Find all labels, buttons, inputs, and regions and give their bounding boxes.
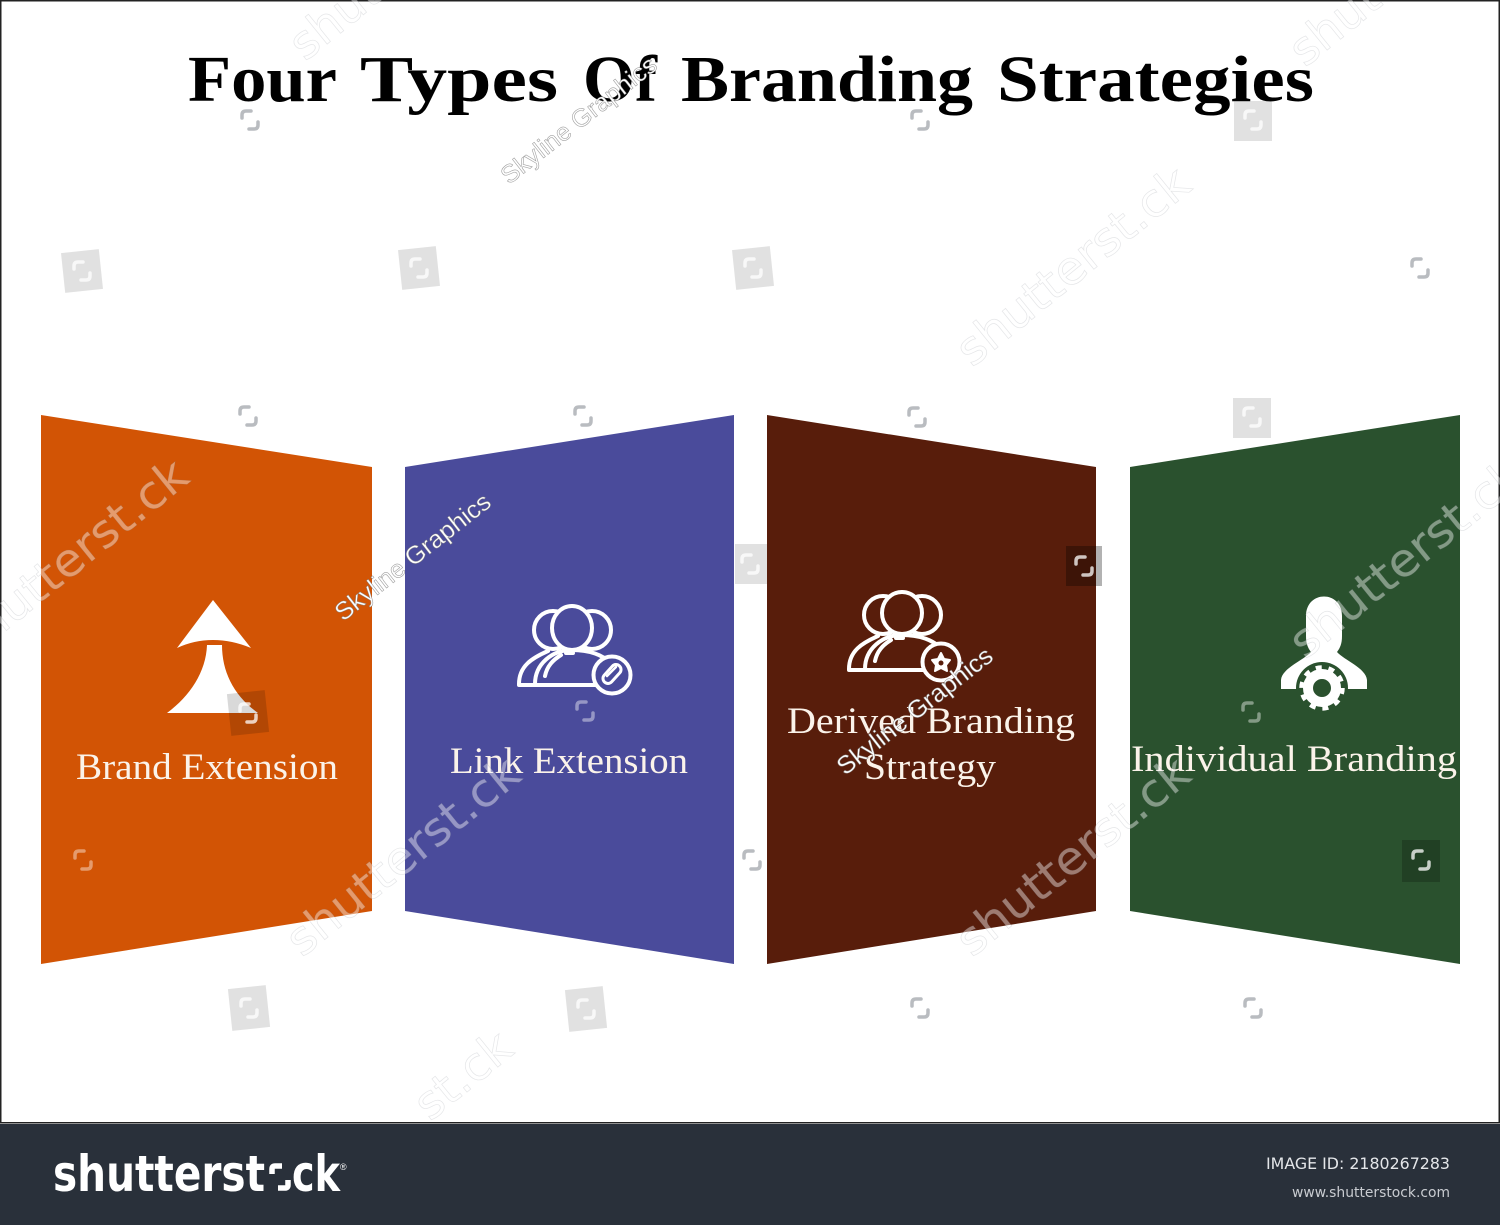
panel: individual branding	[1130, 415, 1460, 964]
website: www.shutterstock.com	[1292, 1185, 1450, 1201]
label: derived branding strategy	[787, 701, 1075, 788]
footer logo: ck	[292, 1145, 341, 1203]
watermark marks on white	[240, 111, 1428, 1017]
label: brand extension: Brand Extension	[76, 747, 338, 788]
title: Branding	[681, 43, 973, 116]
icon: people with star	[849, 592, 960, 680]
icon: person with gear	[1281, 596, 1367, 714]
label: derived branding strategy: Strategy	[864, 747, 997, 788]
label: individual branding: Individual Branding	[1131, 739, 1457, 780]
watermarks: Skyline Graphics	[495, 51, 662, 190]
title: Types	[360, 43, 558, 116]
watermarks: Skyline Graphics	[831, 642, 998, 781]
registered mark: ®	[340, 1162, 347, 1172]
watermarks: Skyline Graphics	[329, 488, 496, 627]
title: Four	[188, 43, 337, 116]
panel: link extension	[405, 415, 734, 964]
watermark marks inside squares	[74, 111, 1429, 1018]
icon: people with paperclip	[519, 606, 630, 694]
footer logo: shutterst	[53, 1145, 265, 1203]
label: link extension: Link Extension	[450, 741, 688, 782]
panel: brand extension	[41, 415, 372, 964]
watermarks: st.ck	[403, 1019, 523, 1131]
label: derived branding strategy: Derived Branding	[787, 701, 1075, 742]
footer bar	[0, 1124, 1500, 1225]
title: Strategies	[997, 43, 1314, 116]
watermark marks on panels	[75, 702, 1259, 869]
watermark squares	[61, 101, 1440, 1032]
icon: upward arrow	[167, 600, 258, 713]
watermarks: shutterst.ck	[945, 155, 1201, 377]
title	[188, 43, 1314, 116]
image id: IMAGE ID: 2180267283	[1266, 1154, 1450, 1173]
panel: derived branding strategy	[767, 415, 1096, 964]
watermarks: shutterst.ck	[275, 745, 531, 967]
title: Of	[583, 43, 658, 116]
watermarks: shutterst.ck	[945, 745, 1201, 967]
